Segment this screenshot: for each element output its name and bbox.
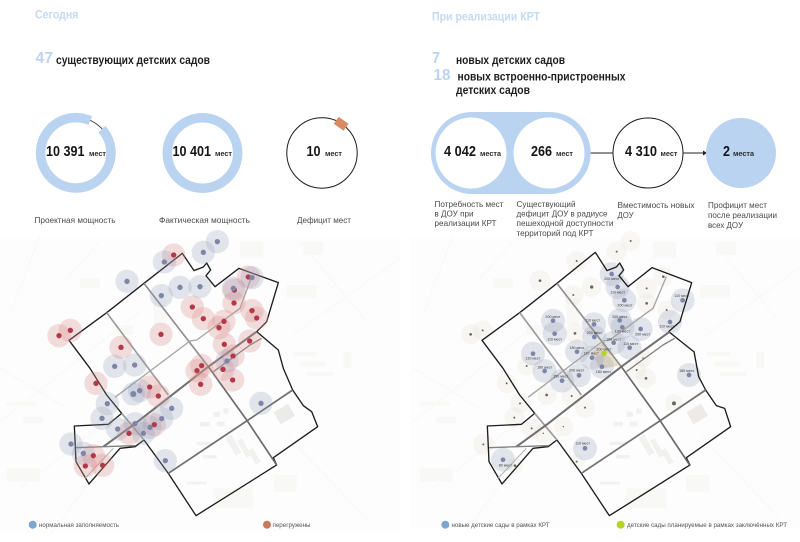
stat: 7 new kindergartens: новых детских садов	[456, 55, 565, 67]
caption: existing deficit	[516, 199, 614, 238]
stat: 18 new built-in kindergartens	[434, 67, 626, 97]
caption: design capacity: Проектная мощность	[34, 215, 116, 225]
seat labels: 200 мест	[612, 315, 628, 319]
seat labels: 150 мест	[553, 374, 569, 378]
pill: demand plus deficit: мест	[556, 151, 574, 158]
caption: new capacity	[618, 200, 695, 220]
legend: normal occupancy: нормальная заполняемость	[39, 522, 120, 529]
seat labels: 180 мест	[596, 370, 611, 374]
circle: surplus: места	[733, 151, 754, 158]
map: current kindergartens	[0, 230, 400, 535]
heading: today: Сегодня	[35, 10, 78, 22]
caption: actual capacity: Фактическая мощность	[159, 215, 251, 225]
circle: surplus	[706, 118, 776, 188]
caption: deficit: Дефицит мест	[297, 215, 351, 225]
seat labels	[499, 277, 695, 467]
seat labels: 200 мест	[617, 304, 633, 308]
circle: new capacity	[613, 118, 683, 188]
seat labels: 200 мест	[587, 331, 602, 335]
donut: actual capacity: мест	[215, 151, 233, 158]
caption: existing deficit: пешеходной доступности	[516, 218, 614, 228]
seat labels: 180 мест	[606, 338, 622, 342]
seat labels: 110 мест	[674, 294, 689, 298]
normal kindergartens dots	[68, 239, 264, 463]
map: after KRT	[410, 231, 800, 535]
pill: demand plus deficit: 266	[531, 144, 552, 160]
seat labels: 200 мест	[604, 277, 620, 281]
caption: surplus	[708, 200, 777, 230]
seat labels: 180 мест	[537, 365, 553, 369]
planned area highlight	[592, 342, 620, 369]
stat: 47 existing kindergartens	[36, 50, 210, 67]
pill: demand plus deficit: 4 042	[444, 144, 476, 160]
seat labels: 110 мест	[547, 337, 562, 341]
seat labels: 200 мест	[545, 315, 561, 319]
stat: 18 new built-in kindergartens: детских садов	[456, 85, 530, 97]
stat: 18 new built-in kindergartens: новых встроенно-пристроенных	[458, 72, 626, 84]
caption: demand	[434, 199, 504, 228]
heading: after KRT: При реализации КРТ	[432, 12, 540, 24]
seat labels: 130 мест	[615, 330, 630, 334]
connector line	[591, 152, 613, 154]
donut: seat deficit: 10	[306, 144, 320, 160]
planned kindergarten dot	[601, 351, 607, 356]
legend: planned kindergartens: детские сады планируемые в рамках заключённых КРТ	[627, 522, 787, 529]
arrow	[683, 150, 707, 156]
seat labels: 110 мест	[584, 352, 599, 356]
pill: demand plus deficit	[431, 112, 591, 194]
caption: demand: в ДОУ при	[434, 208, 474, 218]
seat labels: 110 мест	[659, 324, 674, 328]
seat labels: 180 мест	[679, 369, 695, 373]
seat labels: 200 мест	[569, 369, 585, 373]
caption: demand: реализации КРТ	[434, 218, 496, 228]
pill: demand plus deficit: места	[480, 151, 501, 158]
caption: new capacity: Вместимость новых	[618, 200, 695, 210]
donut: actual capacity: 10 401	[172, 144, 211, 160]
caption: demand: Потребность мест	[434, 199, 504, 209]
caption: surplus: Профицит мест	[708, 200, 767, 210]
stat: 7 new kindergartens	[432, 50, 565, 67]
seat labels: 110 мест	[610, 290, 625, 294]
donut: design capacity: 10 391	[46, 144, 84, 160]
overloaded kindergartens dots	[56, 252, 259, 469]
circle: new capacity: 4 310	[625, 144, 657, 160]
legend: new kindergartens: новые детские сады в рамках КРТ	[452, 522, 550, 529]
caption: new capacity: ДОУ	[618, 210, 634, 220]
donut: seat deficit: мест	[325, 151, 343, 158]
roads	[76, 277, 293, 478]
caption: existing deficit: дефицит ДОУ в радиусе	[516, 208, 608, 218]
new kindergartens halos	[491, 262, 701, 472]
seat labels: 110 мест	[575, 442, 590, 446]
stat: 7 new kindergartens: 7	[432, 50, 440, 67]
overloaded kindergartens halos	[47, 243, 268, 478]
seat labels: 100 мест	[596, 347, 612, 351]
seat labels: 80 мест	[499, 463, 512, 467]
stat: 47 existing kindergartens: существующих детских садов	[56, 55, 210, 67]
seat labels: 180 мест	[569, 346, 585, 350]
legend: overloaded	[263, 521, 311, 529]
seat labels: 110 мест	[585, 318, 600, 322]
legend: overloaded: перегружены	[272, 522, 311, 529]
donut: seat deficit	[287, 117, 357, 188]
caption: surplus: после реализации	[708, 210, 777, 220]
seat labels: 110 мест	[526, 356, 541, 360]
stat: 18 new built-in kindergartens: 18	[434, 67, 451, 84]
donut: actual capacity	[167, 118, 238, 188]
existing kindergartens faint halos	[461, 231, 683, 474]
district boundary	[69, 253, 318, 516]
caption: surplus: всех ДОУ	[708, 220, 744, 230]
normal kindergartens halos	[59, 230, 273, 472]
circle: surplus: 2	[723, 144, 730, 160]
district boundary	[482, 252, 731, 516]
circle: new capacity: мест	[660, 151, 678, 158]
seat labels: 200 мест	[635, 332, 651, 336]
existing kindergartens markers	[469, 240, 676, 467]
donut: design capacity: мест	[89, 151, 107, 158]
new kindergartens dots	[501, 272, 691, 462]
stat: 47 existing kindergartens: 47	[36, 50, 53, 67]
caption: existing deficit: Существующий	[516, 199, 576, 209]
caption: existing deficit: территорий под КРТ	[516, 228, 594, 238]
roads	[489, 277, 706, 478]
seat labels: 110 мест	[623, 342, 638, 346]
donut: design capacity	[40, 118, 112, 188]
